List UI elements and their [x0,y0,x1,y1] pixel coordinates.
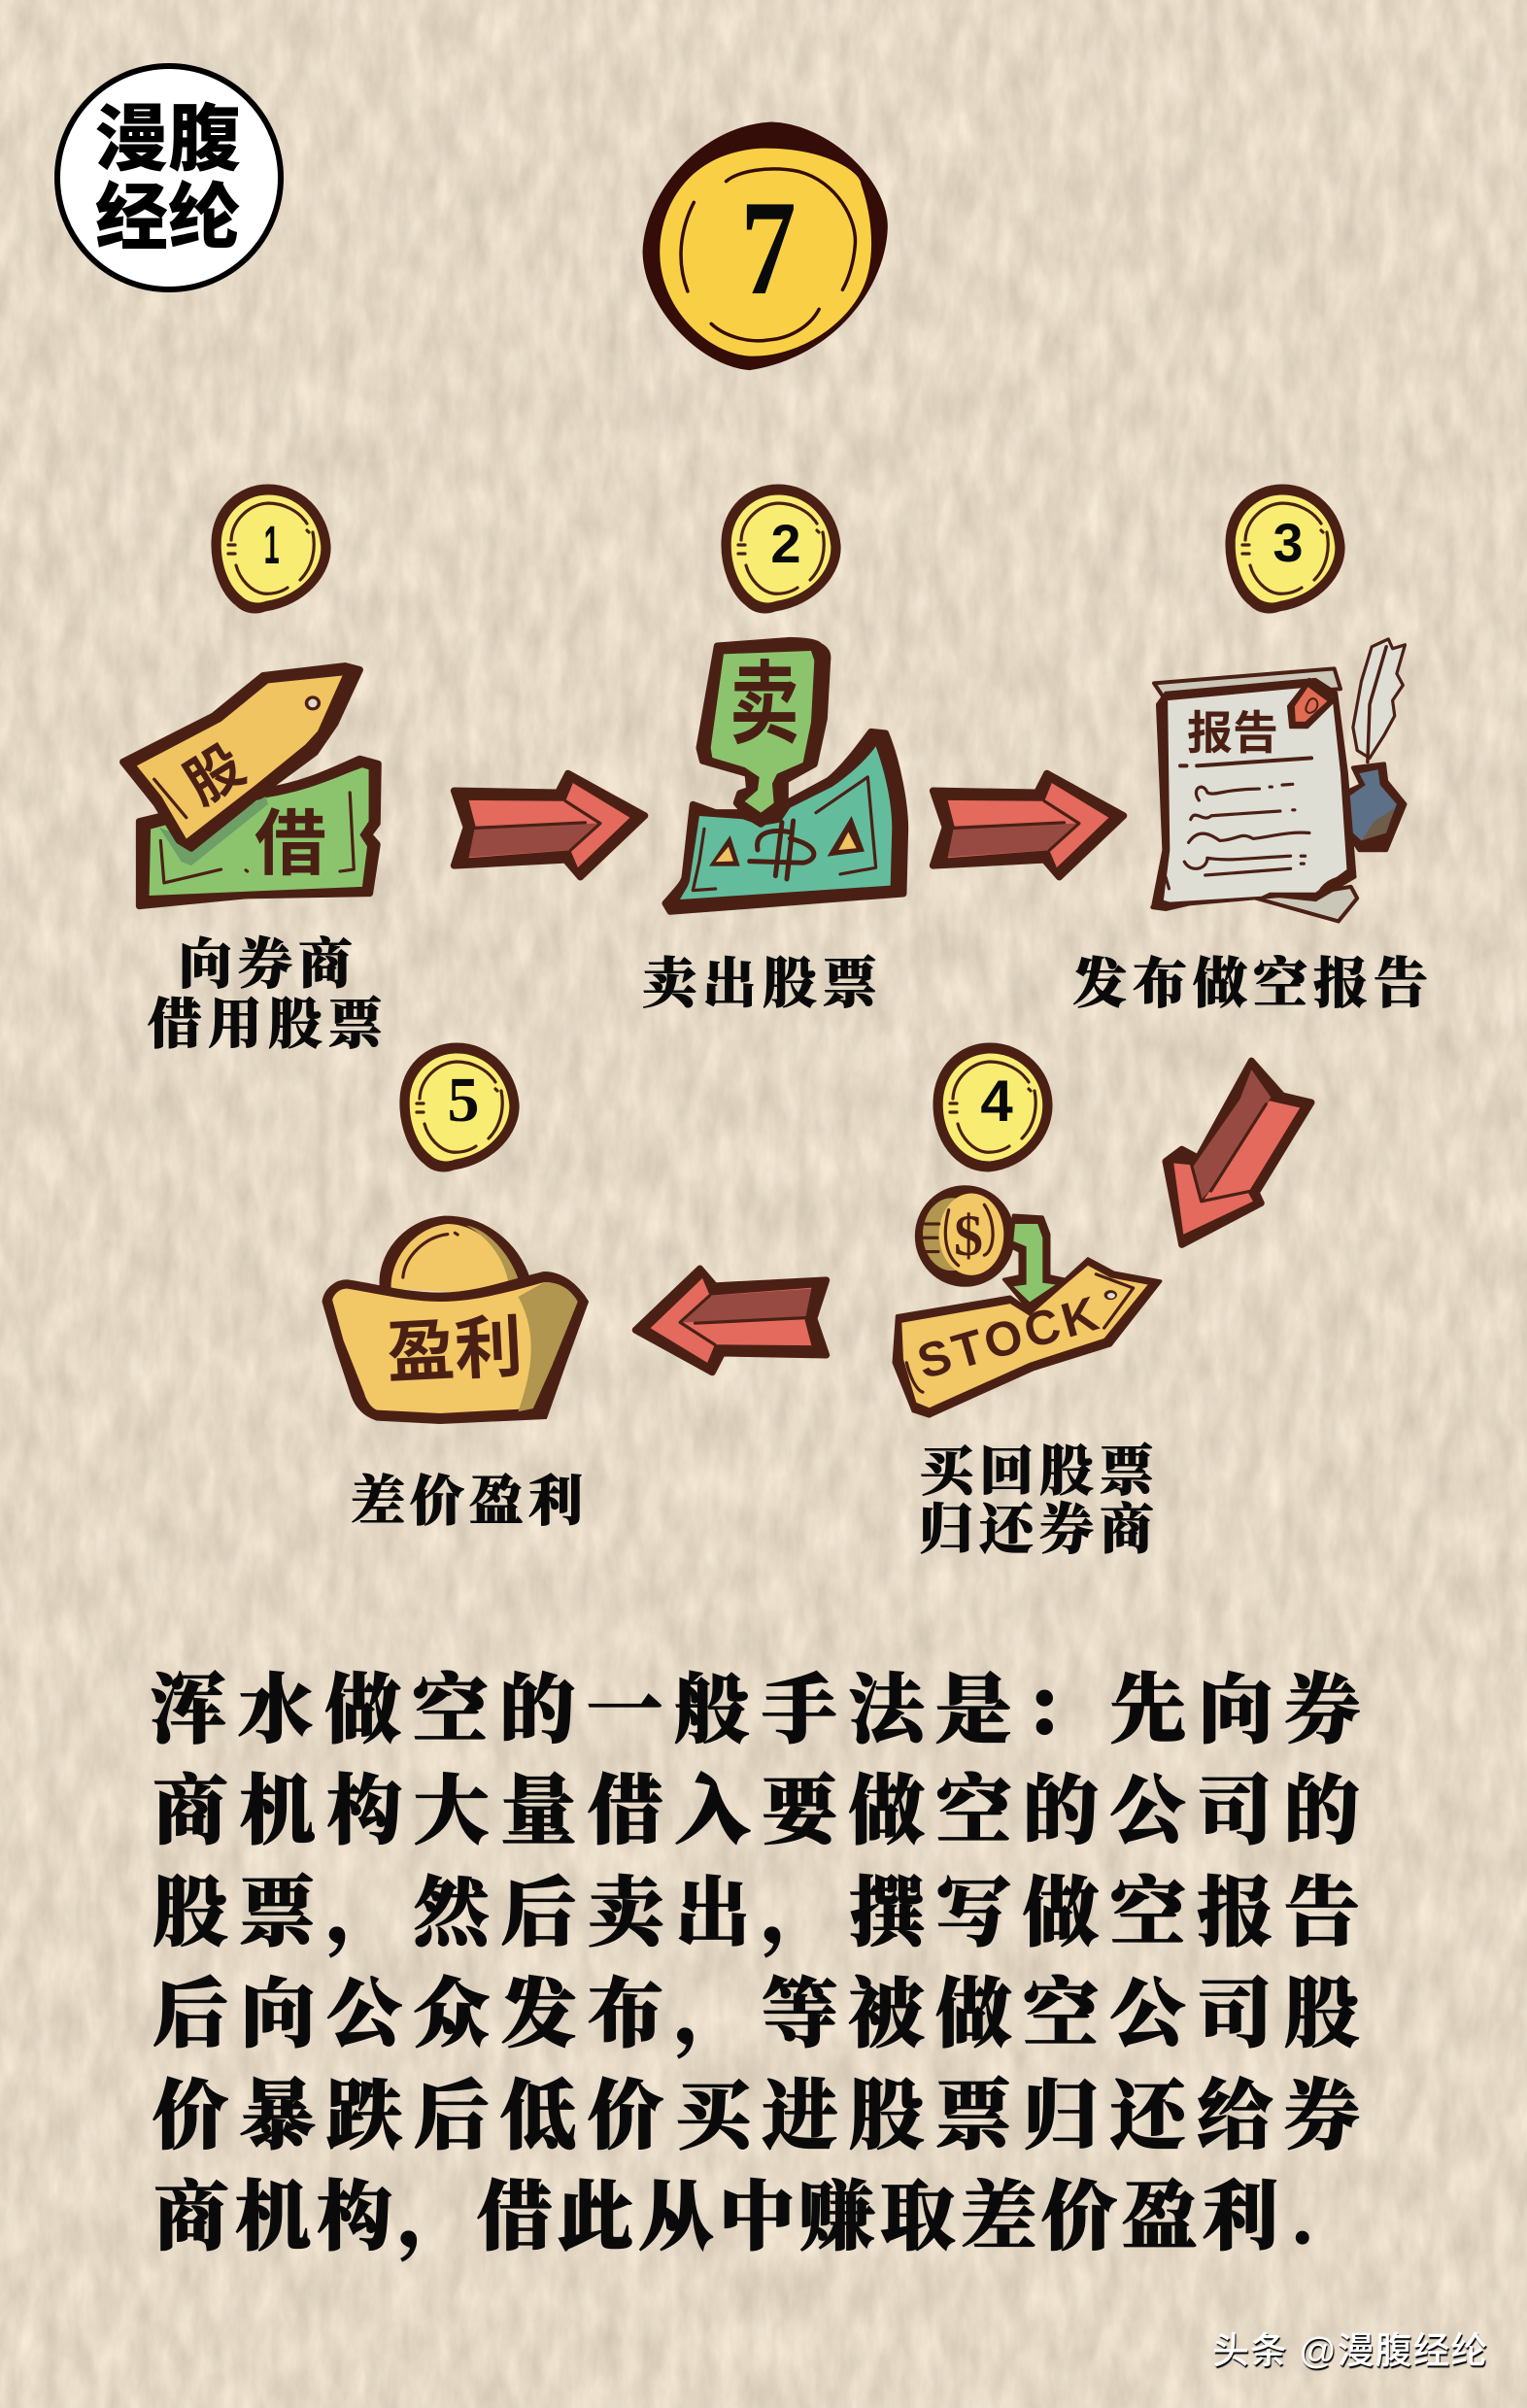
icon: sell tag over bill: 卖 [730,653,799,756]
icon: report scroll with quill and ink bottle [1152,639,1405,921]
icon: stock tag over loan bill [123,666,378,906]
coin: number 3 [1226,485,1344,613]
caption: step 4: 归还券商 [919,1501,1160,1561]
caption: step 3: 发布做空报告 [1072,954,1434,1015]
caption: step 4: 买回股票 [919,1442,1160,1503]
icon: gold ingot: 盈利 [385,1308,525,1392]
text block: explanation paragraph: 商机构大量借入要做空的公司的 [153,1769,1371,1853]
icon: coin, green arrow and STOCK tag: $ [954,1204,983,1268]
arrow: step 3 to step 4 [1166,1061,1311,1244]
coin: number 5 [400,1043,519,1171]
icon: gold ingot [323,1217,588,1423]
coin: number 1: 1 [264,516,280,575]
text block: explanation paragraph: 借此从中赚取差价盈利 [477,2175,1283,2259]
coin: number 2: 2 [770,513,801,574]
step 4: buy back and return shares [894,1043,1161,1561]
text block: explanation paragraph: 价暴跌后低价买进股票归还给券 [153,2074,1371,2158]
watermark: 头条 @漫腹经纶 [1212,2331,1488,2372]
text block: explanation paragraph: 商机构， [153,2175,480,2261]
caption: step 4 [919,1442,1160,1561]
arrow: step 1 to step 2 [454,773,645,877]
logo: 漫腹经纶 badge: 漫腹 [95,98,241,180]
caption: step 1 [148,935,389,1056]
arrow: step 2 to step 3 [933,773,1124,877]
coin: number 2 [722,485,840,613]
caption: step 1: 向券商 [178,935,358,996]
step 5: profit from price difference [323,1043,588,1533]
logo: 漫腹经纶 badge: 经纶 [95,177,241,258]
text block: explanation paragraph: . [1293,2175,1323,2259]
caption: step 5: 差价盈利 [351,1473,588,1533]
icon: stock tag over loan bill: 借 [254,803,326,884]
coin: number 4 [933,1043,1052,1171]
title coin: number 7 [643,122,887,370]
icon: sell tag over bill [665,640,905,911]
caption: step 1: 借用股票 [148,996,389,1056]
icon: stock tag over loan bill: 股 [175,733,255,817]
text block: explanation paragraph: 股票，然后卖出，撰写做空报告 [153,1871,1371,1957]
step 2: sell shares [642,485,905,1015]
text block: explanation paragraph: 浑水做空的一般手法是：先向券 [151,1668,1372,1752]
coin: number 3: 3 [1272,512,1304,573]
logo: 漫腹经纶 badge [57,66,281,289]
title coin: number 7: 7 [740,172,797,323]
icon: coin, green arrow and STOCK tag [894,1186,1161,1416]
text block: explanation paragraph: 后向公众发布，等被做空公司股 [153,1972,1371,2058]
coin: number 1 [212,485,330,613]
icon: coin, green arrow and STOCK tag: STOCK [911,1285,1107,1389]
step 1: borrow shares [123,485,389,1056]
coin: number 4: 4 [980,1068,1013,1134]
text block: explanation paragraph [151,1668,1372,2261]
icon: report scroll with quill and ink bottle: 报告 [1187,707,1278,759]
step 3: publish short report [1072,485,1434,1015]
caption: step 2: 卖出股票 [642,955,883,1015]
coin: number 5: 5 [447,1065,480,1136]
arrow: step 4 to step 5 [635,1269,827,1373]
